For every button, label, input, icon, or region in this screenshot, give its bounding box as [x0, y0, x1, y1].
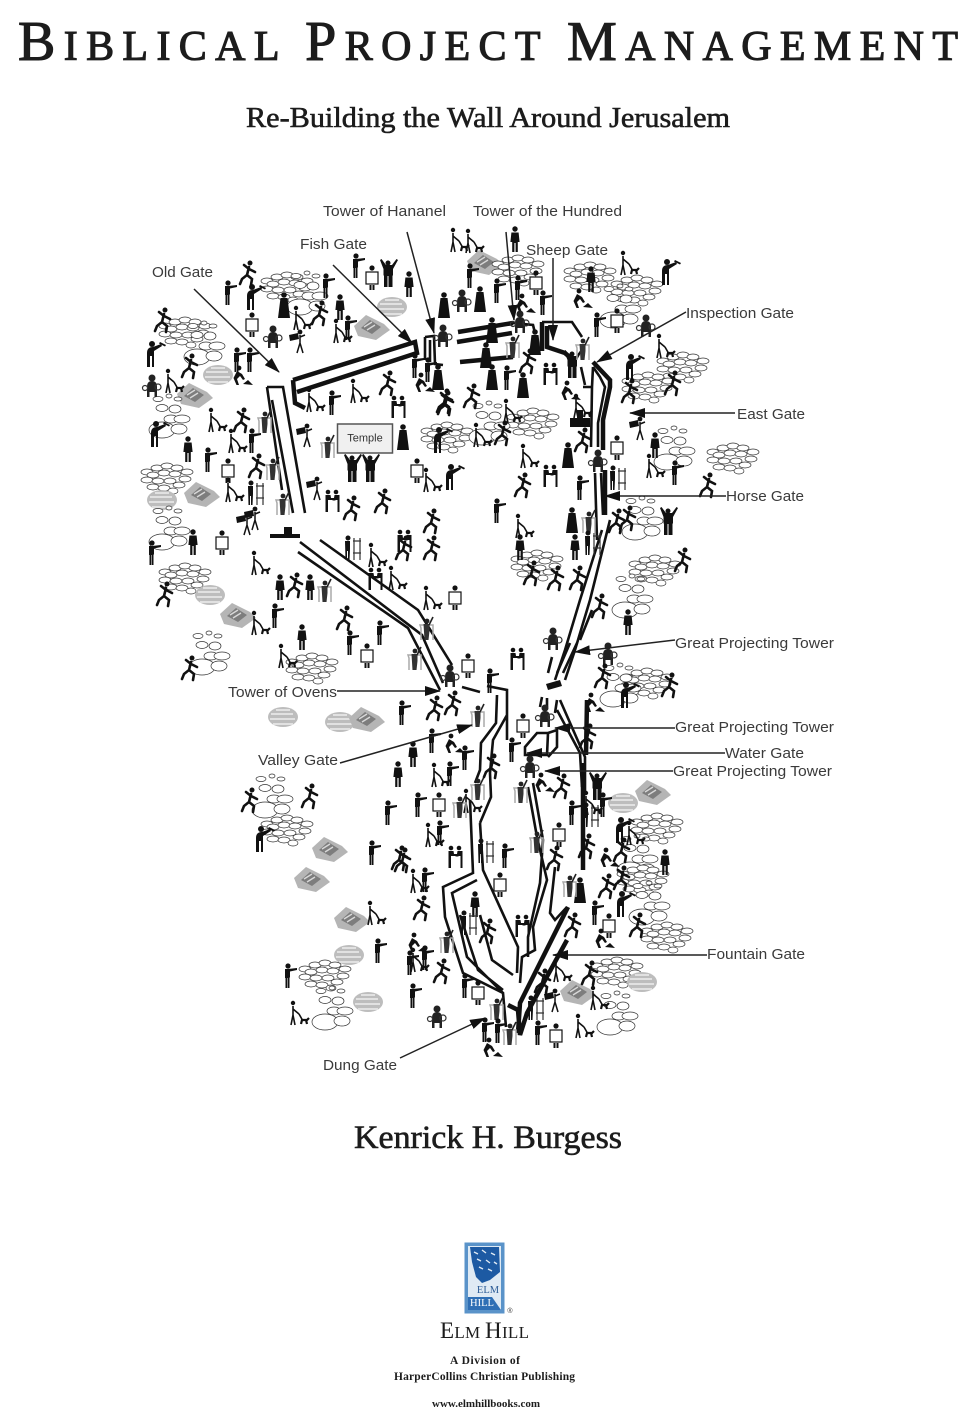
- gate and tower labels: Water Gate: [725, 745, 804, 762]
- map: wall around Jerusalem: [141, 203, 834, 1074]
- walls: [267, 322, 610, 1035]
- gate and tower labels: Fish Gate: [300, 236, 367, 253]
- workers: [142, 226, 715, 1057]
- imprint publisher: HarperCollins Christian Publishing: [394, 1371, 575, 1383]
- gate and tower labels: Tower of the Hundred: [473, 203, 622, 220]
- temple: Temple: [347, 432, 383, 444]
- gate and tower labels: East Gate: [737, 406, 805, 423]
- website: www.elmhillbooks.com: [432, 1398, 540, 1410]
- gate and tower labels: Great Projecting Tower: [673, 763, 832, 780]
- gate and tower labels: Horse Gate: [726, 488, 804, 505]
- gate and tower labels: Fountain Gate: [707, 946, 805, 963]
- author: Kenrick H. Burgess: [354, 1120, 622, 1156]
- imprint line: A Division of: [450, 1355, 520, 1367]
- gate and tower labels: Dung Gate: [323, 1057, 397, 1074]
- logo wordmark: ELM HILL: [440, 1318, 529, 1343]
- temple: [338, 424, 392, 453]
- gate and tower labels: Tower of Hananel: [323, 203, 446, 220]
- gate and tower labels: [152, 203, 834, 1074]
- gate and tower labels: Great Projecting Tower: [675, 635, 834, 652]
- gate and tower labels: Inspection Gate: [686, 305, 794, 322]
- gate and tower labels: Tower of Ovens: [228, 684, 337, 701]
- subtitle: Re-Building the Wall Around Jerusalem: [246, 103, 730, 134]
- gate and tower labels: Old Gate: [152, 264, 213, 281]
- publisher logo: [394, 1242, 575, 1410]
- arrows: [194, 232, 735, 1058]
- logo mark: elm tree: HILL: [470, 1298, 494, 1309]
- gate and tower labels: Valley Gate: [258, 752, 338, 769]
- logo mark: elm tree: ®: [507, 1307, 513, 1315]
- title: BIBLICAL PROJECT MANAGEMENT: [18, 11, 958, 73]
- gate and tower labels: Great Projecting Tower: [675, 719, 834, 736]
- logo mark: elm tree: ELM: [477, 1285, 500, 1296]
- rock piles and timber: [141, 250, 759, 1035]
- gate and tower labels: Sheep Gate: [526, 242, 608, 259]
- logo mark: elm tree: [464, 1242, 513, 1315]
